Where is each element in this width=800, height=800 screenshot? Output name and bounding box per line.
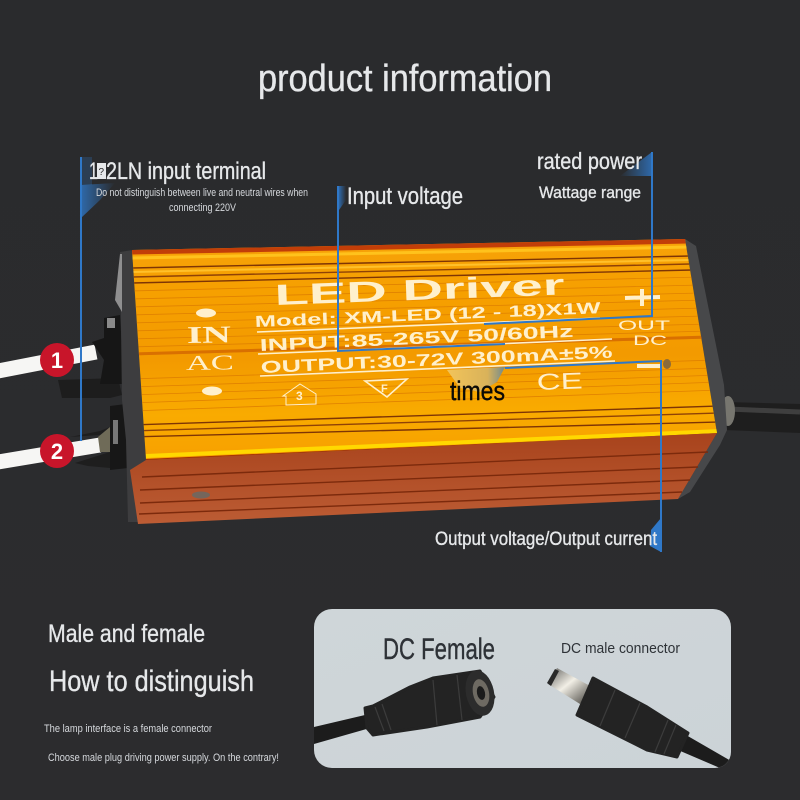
label: times: times: [450, 376, 505, 406]
icon: house 3: [283, 384, 316, 405]
right end cap: [678, 239, 727, 499]
label: DC male connector: DC male connector: [561, 640, 680, 657]
heading: input voltage: Input voltage: [347, 183, 463, 210]
dots: [196, 308, 216, 318]
IN label: IN: [187, 322, 232, 349]
badge 1: 1: [51, 348, 63, 373]
heading: LN input terminal: ?: [98, 167, 104, 178]
CE mark: CE: [536, 367, 583, 395]
input line: INPUT:85-265V 50/60Hz: [259, 322, 574, 355]
heading: output voltage and current: Output voltage/Output current: [435, 529, 658, 550]
LED driver product photo: [0, 239, 800, 524]
badge 2: 2: [51, 439, 63, 464]
heading: rated power: rated power: [537, 148, 642, 174]
plus sign: [625, 289, 660, 306]
printed label text: [186, 269, 671, 405]
AC label: AC: [186, 350, 234, 375]
icon: house 3: 3: [296, 389, 303, 403]
blue callout: input voltage: [338, 186, 505, 351]
heading: how to distinguish: How to distinguish: [49, 665, 254, 698]
top face: [130, 239, 720, 460]
heading: LN input terminal: 2LN input terminal: [106, 158, 266, 185]
lower dot: [202, 386, 222, 396]
icon: DC male connector: [547, 668, 731, 768]
badge 2: [40, 434, 74, 468]
output line: OUTPUT:30-72V 300mA±5%: [260, 343, 613, 377]
note: lamp interface: The lamp interface is a female connector: [44, 723, 212, 735]
white input wires: [0, 352, 100, 462]
black terminal clamps: [58, 315, 128, 470]
icon: F triangle: F: [381, 383, 388, 395]
side face: [130, 433, 717, 524]
label: DC Female: DC Female: [383, 633, 495, 666]
note: live and neutral wires: connecting 220V: [169, 202, 237, 214]
model line: Model: XM-LED (12 - 18)X1W: [254, 300, 602, 331]
note: live and neutral wires: Do not distinguish between live and neutral wires when: [96, 187, 308, 199]
LED Driver heading: LED Driver: [274, 269, 565, 312]
heading: LN input terminal: 1: [89, 158, 98, 185]
output cable: [721, 396, 800, 433]
blue callout: rated power: [484, 152, 652, 324]
minus sign: [637, 364, 661, 368]
icon: F triangle: [365, 379, 407, 397]
icon: DC female connector: [314, 668, 498, 744]
left end cap: [115, 250, 146, 522]
blue callout: output voltage and current: [505, 361, 661, 552]
OUT label: OUT: [618, 317, 671, 333]
title: product information: [258, 58, 552, 100]
blue callout: LN input terminal: [81, 157, 115, 441]
badge 1: [40, 343, 74, 377]
note: wattage range: Wattage range: [539, 183, 641, 202]
note: choose male plug: Choose male plug driving power supply. On the contrary!: [48, 752, 279, 764]
screw: [663, 359, 671, 369]
heading: male and female: Male and female: [48, 620, 205, 648]
DC label: DC: [633, 332, 667, 348]
underlines: [257, 318, 615, 376]
note: live and neutral wires: [96, 187, 308, 214]
panel: DC connectors: [314, 609, 731, 768]
gold patch behind times: [447, 367, 505, 392]
